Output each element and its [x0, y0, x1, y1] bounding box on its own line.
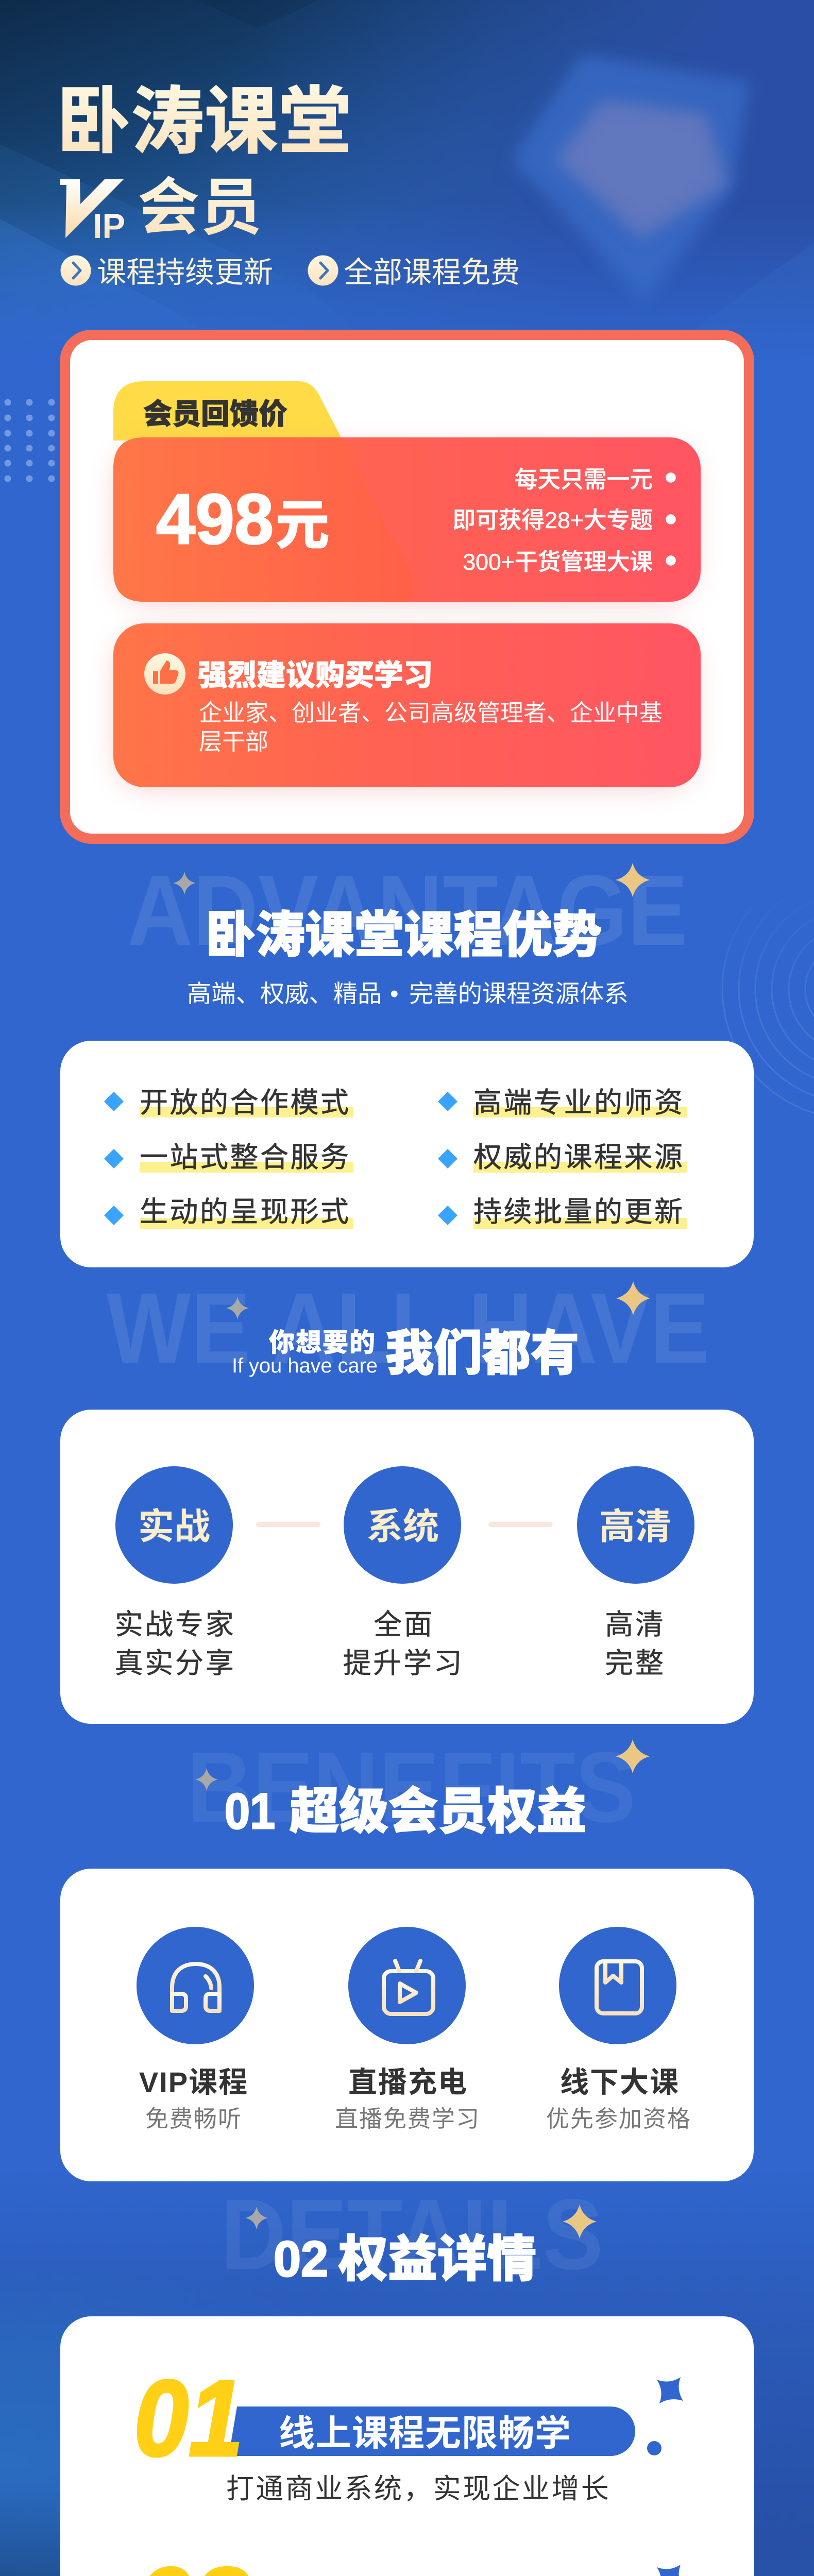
detail 01: online courses — [134, 2358, 683, 2504]
panel: advantages list — [60, 1041, 754, 1267]
recommendation card: 强烈建议购买学习 — [198, 659, 433, 692]
list text: 开放的合作模式 — [140, 1087, 351, 1118]
feature: high definition: 高清 — [605, 1608, 666, 1640]
decorative dot grid — [4, 399, 55, 482]
feature: high definition: 完整 — [605, 1647, 666, 1679]
benefit: VIP courses: VIP课程 — [139, 2066, 248, 2098]
feature tag: all courses free: 全部课程免费 — [344, 256, 520, 289]
heading: we all have: WE ALL HAVE — [107, 1272, 709, 1384]
benefit: VIP courses: 免费畅听 — [145, 2106, 242, 2132]
heading: course advantages: 卧涛课堂课程优势 — [206, 908, 602, 963]
icon: book — [597, 1961, 642, 2013]
list text — [140, 1087, 685, 1228]
heading: course advantages: • — [390, 980, 399, 1008]
feature tag: courses keep updating: 课程持续更新 — [97, 256, 273, 289]
background shield: blurred emblem — [512, 54, 750, 301]
icon: tv play — [384, 1961, 433, 2014]
icon: VIP badge — [60, 179, 125, 246]
heading: course advantages: 完善的课程资源体系 — [409, 980, 629, 1008]
benefit: offline courses: 线下大课 — [560, 2066, 680, 2098]
heading: course advantages: 高端、权威、精品 — [187, 980, 382, 1008]
heading: we all have: 我们都有 — [385, 1326, 579, 1380]
heading: 01 super member benefits: BENEFITS — [187, 1731, 636, 1843]
feature: systematic: 系统 — [367, 1506, 439, 1547]
feature: systematic — [343, 1466, 464, 1679]
feature: practical: 实战专家 — [115, 1608, 235, 1640]
benefit: VIP courses — [137, 1927, 254, 2132]
price card: 498 — [156, 480, 274, 559]
price benefits list — [452, 467, 676, 575]
heading: 02 benefit details: 02 — [274, 2231, 328, 2287]
price benefits list: 每天只需一元 — [515, 467, 653, 493]
panel: what you get — [60, 1410, 754, 1724]
highlighted item bars — [140, 1107, 687, 1229]
feature: high definition: 高清 — [599, 1506, 671, 1547]
panel: member price — [65, 335, 749, 839]
heading: 02 benefit details: DETAILS — [221, 2178, 603, 2291]
heading: 01 super member benefits: 超级会员权益 — [290, 1784, 586, 1839]
subtitle: member: 会员 — [138, 173, 262, 242]
benefit: live charging — [335, 1927, 480, 2132]
diamond bullets — [104, 1092, 457, 1225]
heading: 02 benefit details: 权益详情 — [338, 2232, 536, 2287]
list text: 权威的课程来源 — [473, 1141, 685, 1173]
price card: 元 — [275, 495, 330, 556]
decorative concentric rings — [722, 860, 814, 1118]
recommendation card: 层干部 — [199, 728, 268, 755]
card frame — [65, 335, 749, 839]
detail 02: offline courses — [134, 2545, 683, 2576]
icon: VIP badge: IP — [93, 207, 125, 246]
recommendation card: 企业家、创业者、公司高级管理者、企业中基 — [199, 700, 663, 726]
benefit: offline courses — [546, 1927, 691, 2132]
heading: course advantages: ADVANTAGE — [127, 854, 688, 967]
price card — [113, 437, 701, 602]
heading: course advantages — [127, 854, 688, 1008]
detail 01: online courses: 线上课程无限畅学 — [279, 2413, 571, 2453]
feature: practical: 真实分享 — [115, 1647, 235, 1679]
list text: 高端专业的师资 — [473, 1087, 685, 1118]
feature: high definition — [577, 1466, 694, 1679]
list text: 一站式整合服务 — [140, 1141, 351, 1173]
list text: 持续批量的更新 — [473, 1196, 685, 1228]
icon: headphones — [172, 1964, 219, 2011]
price tag tab — [113, 381, 343, 443]
feature: practical: 实战 — [138, 1506, 210, 1547]
heading: we all have: If you have care — [232, 1354, 378, 1377]
list text: 生动的呈现形式 — [140, 1196, 351, 1228]
heading: 01 super member benefits: 01 — [225, 1783, 275, 1839]
recommendation card — [113, 623, 701, 787]
feature: practical — [115, 1466, 235, 1679]
panel: benefit details — [60, 2316, 754, 2576]
price benefits list: 即可获得28+大专题 — [452, 508, 653, 533]
feature: systematic: 全面 — [374, 1608, 434, 1640]
panel: member benefits — [60, 1869, 754, 2181]
price benefits list: 300+干货管理大课 — [463, 550, 653, 575]
benefit: live charging: 直播充电 — [348, 2066, 468, 2098]
price tag tab: 会员回馈价 — [143, 398, 287, 430]
connector lines — [256, 1522, 553, 1527]
detail 01: online courses: 打通商业系统，实现企业增长 — [226, 2473, 610, 2504]
benefit: live charging: 直播免费学习 — [335, 2106, 480, 2132]
detail 01: online courses: 01 — [134, 2358, 243, 2479]
feature: systematic: 提升学习 — [343, 1647, 464, 1679]
heading: we all have: 你想要的 — [269, 1328, 376, 1357]
benefit: offline courses: 优先参加资格 — [546, 2106, 691, 2132]
title: 卧涛课堂 — [57, 81, 352, 163]
